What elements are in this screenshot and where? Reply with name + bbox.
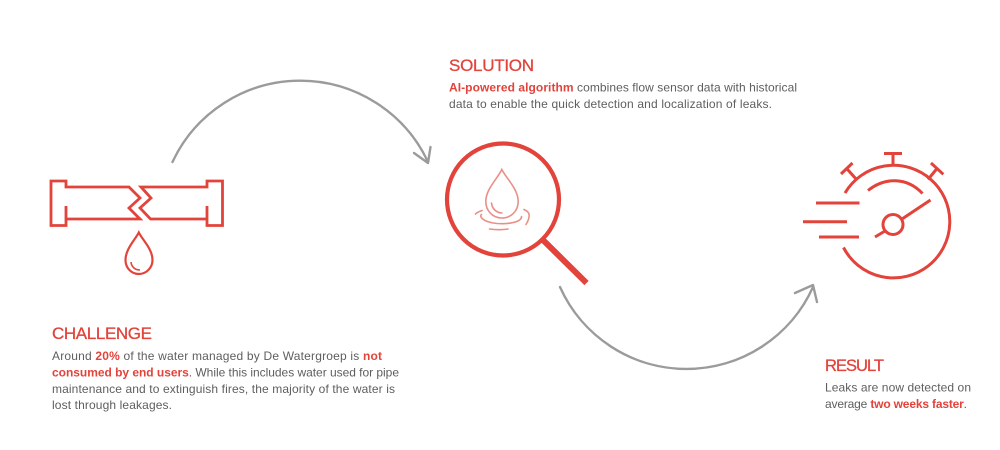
heading and text: challenge: [52, 324, 399, 412]
heading and text: solution: [449, 56, 797, 111]
drop with ripples: [476, 170, 529, 230]
icon: broken pipe with water drop: [51, 181, 222, 274]
left button: [841, 163, 856, 180]
right pipe section: [140, 181, 222, 226]
left pipe section: [51, 181, 140, 226]
speed lines: [803, 203, 860, 237]
heading and text: challenge: lost through leakages.: [52, 398, 172, 412]
drop highlight: [131, 262, 140, 270]
dial outline: [844, 165, 950, 278]
heading and text: result: Leaks are now detected on: [825, 380, 971, 394]
lens: [447, 144, 559, 256]
heading and text: solution: AI-powered algorithm combines flow sensor data with historical: [449, 80, 797, 94]
inner arc: [868, 181, 922, 194]
needle tail: [875, 231, 885, 237]
icon: magnifying glass over water drop: [447, 144, 586, 283]
heading and text: solution: SOLUTION: [449, 56, 534, 75]
heading and text: result: [825, 357, 971, 411]
heading and text: challenge: maintenance and to extinguish fires, the majority of the water is: [52, 382, 395, 396]
heading and text: challenge: Around 20% of the water managed by De Watergroep is not: [52, 349, 382, 363]
hub: [883, 214, 903, 234]
crown: [884, 154, 902, 165]
heading and text: challenge: CHALLENGE: [52, 324, 152, 343]
icon: stopwatch with speed lines: [803, 154, 950, 278]
heading and text: solution: data to enable the quick detection and localization of leaks.: [449, 97, 772, 111]
water drop: [126, 232, 152, 274]
heading and text: result: RESULT: [825, 357, 884, 375]
heading and text: challenge: consumed by end users. While this includes water used for pipe: [52, 366, 399, 380]
arrow: challenge to solution: [172, 81, 430, 163]
needle: [902, 200, 930, 219]
handle: [543, 240, 586, 283]
heading and text: result: average two weeks faster.: [825, 397, 967, 411]
right button: [928, 163, 943, 180]
arrow: solution to result: [560, 285, 817, 369]
